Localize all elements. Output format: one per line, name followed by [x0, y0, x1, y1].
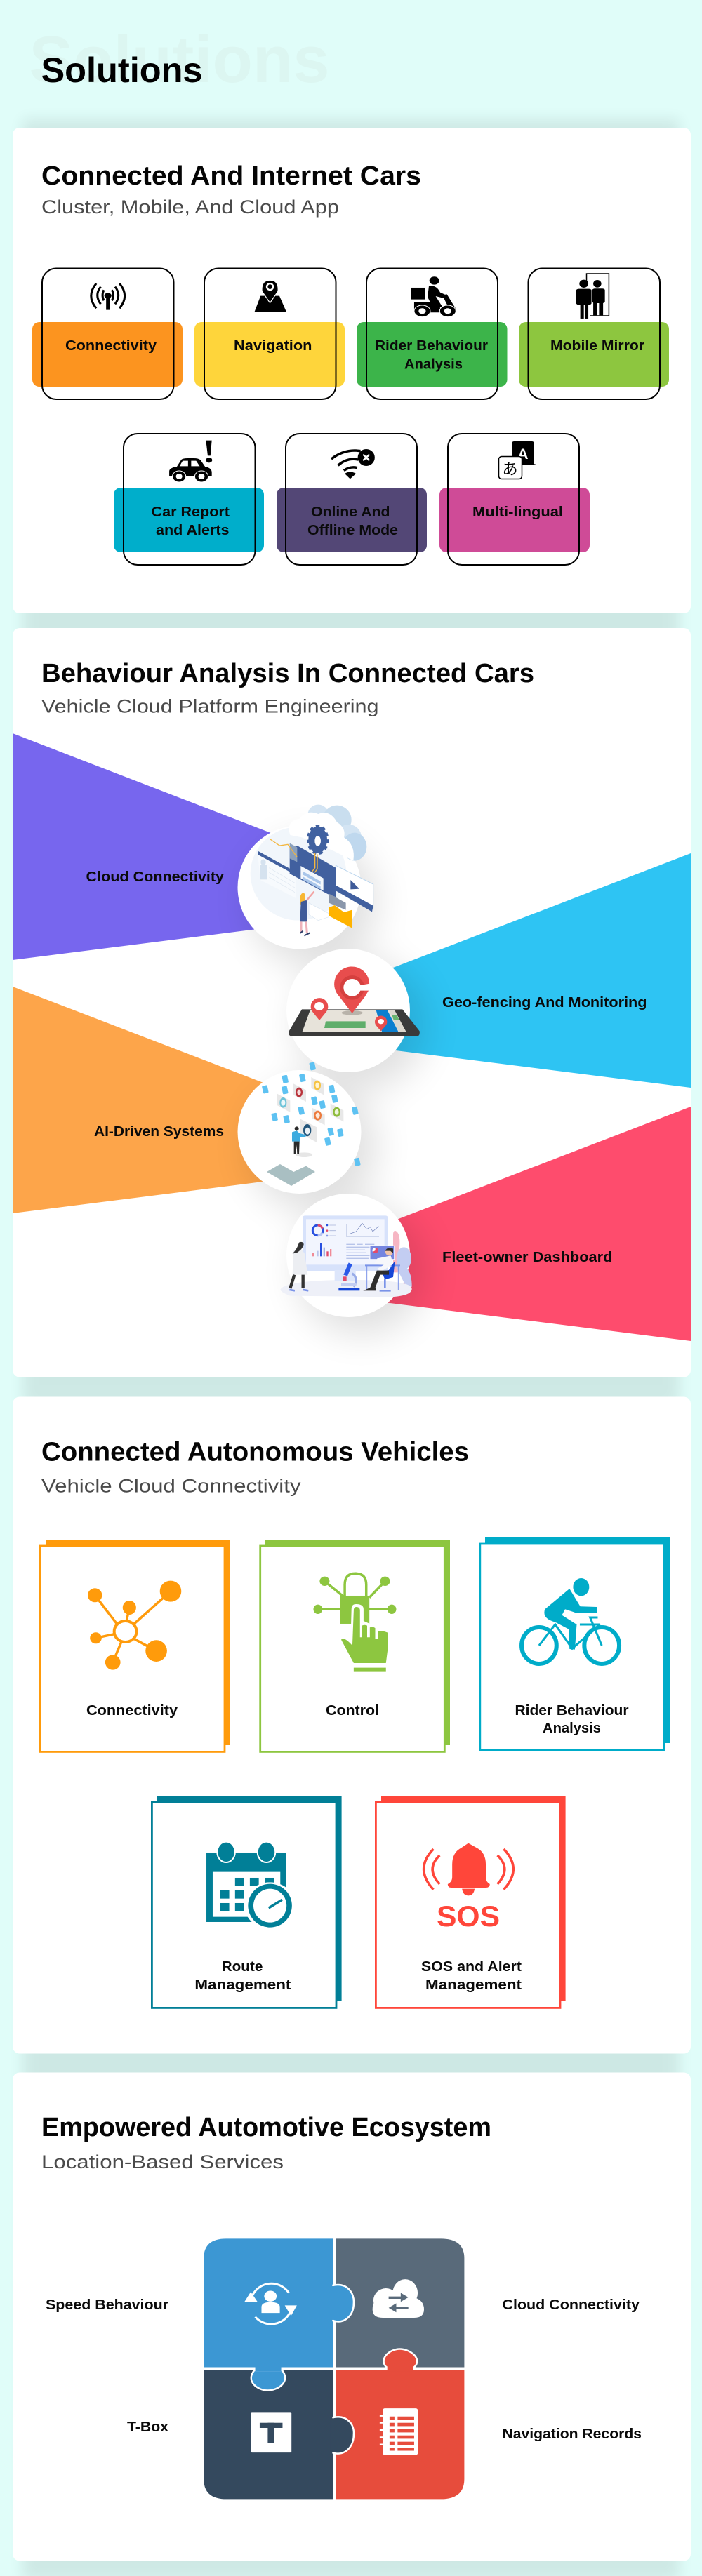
- illustration: ai-driven systems: [262, 1062, 361, 1186]
- wedge: purple: [13, 733, 302, 960]
- puzzle tab: blue right: [331, 2285, 354, 2321]
- label: ai-driven systems: AI-Driven Systems: [94, 1124, 224, 1140]
- icon: notebook: [380, 2408, 418, 2455]
- icon: antenna: [91, 283, 125, 310]
- card: rider behaviour analysis: Rider Behaviour: [375, 338, 488, 354]
- label: fleet-owner dashboard: Fleet-owner Dashboard: [442, 1250, 612, 1265]
- icon: wifi offline: [331, 449, 375, 479]
- puzzle diagram: [204, 2238, 464, 2499]
- tile: route management: Route: [222, 1959, 263, 1975]
- card: navigation: Navigation: [234, 338, 312, 354]
- tile: control: [260, 1540, 450, 1751]
- illustration: geo-fencing map phone: [289, 966, 420, 1036]
- icon: translate: あ: [502, 460, 518, 478]
- tile: rider behaviour analysis: [480, 1537, 670, 1750]
- tile: sos and alert management: SOS and Alert: [421, 1959, 522, 1975]
- card: car report and alerts: and Alerts: [156, 523, 229, 538]
- illustration: cloud platform: [251, 805, 373, 935]
- label: navigation records: Navigation Records: [503, 2427, 642, 2442]
- icon: t box: [251, 2412, 291, 2452]
- label: geo-fencing and monitoring: Geo-fencing And Monitoring: [442, 995, 647, 1010]
- card: car report and alerts: [114, 434, 264, 565]
- icon: map pin: [254, 280, 286, 312]
- icon: people at mirror: [576, 274, 609, 319]
- heading: Empowered Automotive Ecosystem: [41, 2113, 491, 2142]
- icon: car alert: [169, 441, 212, 482]
- heading: Behaviour Analysis In Connected Cars: [41, 659, 534, 688]
- card: multi-lingual: [439, 434, 590, 565]
- card: online and offline mode: [277, 434, 427, 565]
- panel: empowered automotive ecosystem: [13, 2073, 691, 2561]
- label: speed behaviour: Speed Behaviour: [46, 2297, 168, 2313]
- puzzle tab: red top: [383, 2349, 417, 2371]
- icon: delivery scooter: [411, 276, 456, 317]
- tile: route management: [152, 1796, 342, 2008]
- title: [29, 22, 330, 96]
- card: online and offline mode: Offline Mode: [307, 523, 398, 538]
- subheading: Cluster, Mobile, And Cloud App: [41, 196, 339, 218]
- wedge: orange: [13, 987, 302, 1213]
- wedge: cyan: [351, 853, 691, 1088]
- card: connectivity: Connectivity: [65, 338, 157, 354]
- tile: connectivity: [40, 1540, 230, 1751]
- card: multi-lingual: Multi-lingual: [472, 505, 563, 520]
- puzzle tab: blue bottom: [251, 2365, 285, 2391]
- card: rider behaviour analysis: [357, 268, 507, 399]
- card: car report and alerts: Car Report: [152, 505, 230, 520]
- illustration: fleet-owner dashboard: [280, 1215, 412, 1297]
- heading: Connected Autonomous Vehicles: [41, 1437, 469, 1467]
- puzzle piece: blue: [204, 2238, 333, 2368]
- panel: connected and internet cars: [13, 128, 691, 613]
- panel: behaviour analysis in connected cars: [13, 628, 691, 1377]
- icon: lock touch: [313, 1573, 396, 1672]
- subheading: Vehicle Cloud Platform Engineering: [41, 696, 379, 717]
- icon: cyclist: [522, 1578, 619, 1664]
- puzzle piece: navy: [204, 2370, 333, 2499]
- label: cloud connectivity: Cloud Connectivity: [86, 869, 225, 885]
- label: cloud connectivity: Cloud Connectivity: [503, 2297, 640, 2313]
- tile: connectivity: Connectivity: [86, 1703, 178, 1719]
- icon: network nodes: [88, 1581, 181, 1670]
- icon: calendar clock: [206, 1842, 296, 1929]
- heading: Connected And Internet Cars: [41, 161, 421, 191]
- card: rider behaviour analysis: Analysis: [404, 356, 463, 372]
- card: connectivity: [32, 268, 183, 399]
- icon: translate: [498, 441, 536, 479]
- tile: sos and alert management: [376, 1796, 566, 2008]
- tile: sos and alert management: SOS: [437, 1900, 500, 1933]
- title shadow word: Solutions: [29, 22, 330, 96]
- card: mobile mirror: [519, 268, 669, 399]
- puzzle piece: red: [336, 2370, 464, 2499]
- subheading: Vehicle Cloud Connectivity: [41, 1475, 301, 1496]
- icon: cloud transfer: [373, 2279, 424, 2318]
- card: online and offline mode: Online And: [311, 505, 390, 520]
- icon: translate: A: [517, 446, 529, 462]
- tile: sos and alert management: Management: [425, 1977, 522, 1993]
- icon: sos bell: [424, 1843, 513, 1895]
- puzzle piece: slate: [336, 2238, 464, 2368]
- card: mobile mirror: Mobile Mirror: [550, 338, 644, 354]
- card: navigation: [194, 268, 345, 399]
- subheading: Location-Based Services: [41, 2151, 284, 2173]
- tile: rider behaviour analysis: Analysis: [543, 1721, 601, 1736]
- icon: person sync: [244, 2283, 297, 2324]
- wedge: pink: [351, 1107, 691, 1341]
- label: t-box: T-Box: [127, 2420, 168, 2435]
- tile: control: Control: [326, 1703, 379, 1719]
- panel: connected autonomous vehicles: [13, 1396, 691, 2053]
- puzzle tab: navy right: [331, 2417, 354, 2454]
- tile: rider behaviour analysis: Rider Behaviour: [515, 1703, 629, 1719]
- tile: route management: Management: [194, 1977, 291, 1993]
- title word: Solutions: [41, 51, 202, 90]
